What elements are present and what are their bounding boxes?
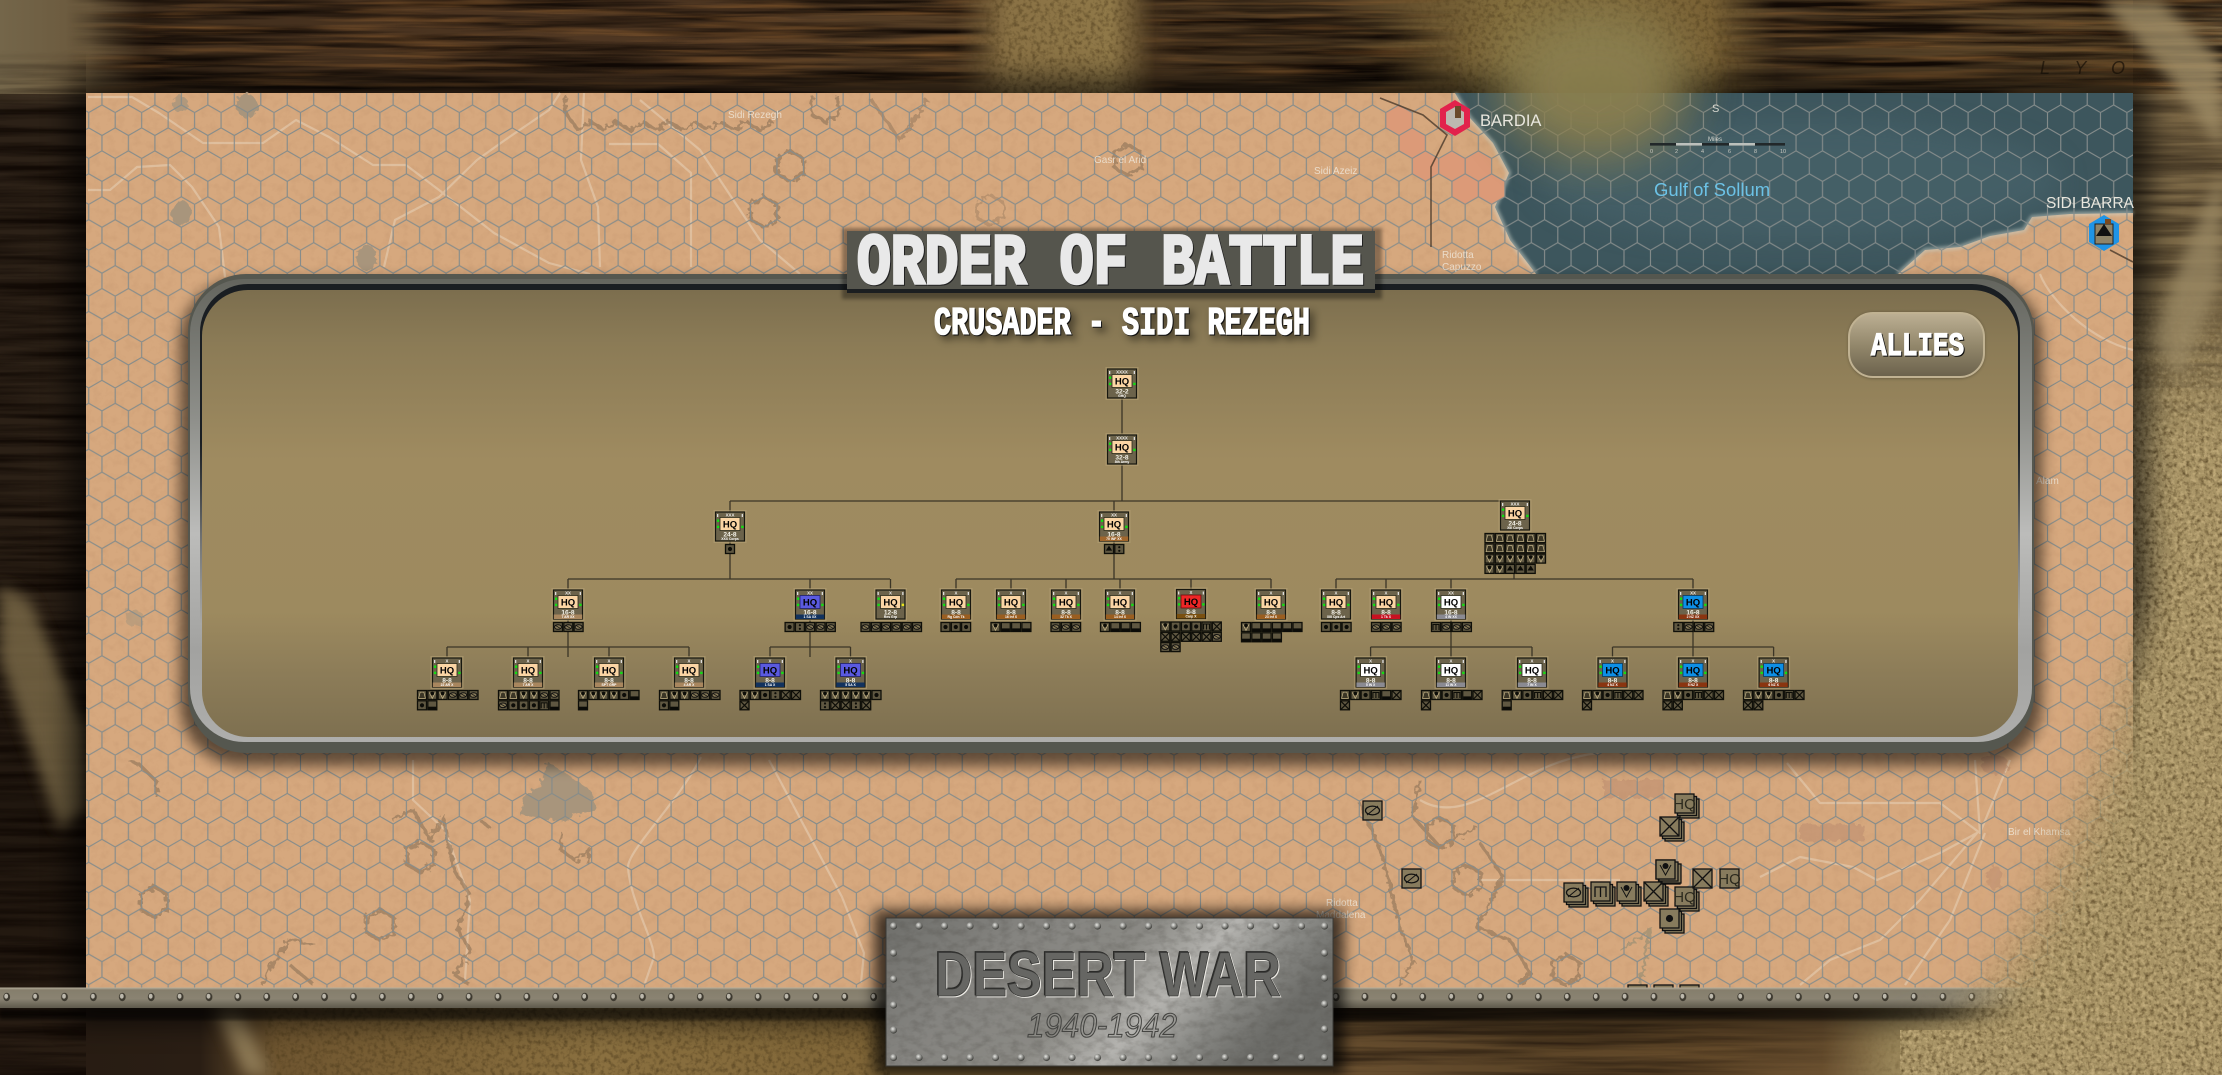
- unit: 2 NZ XX: 16-8: [1686, 609, 1700, 616]
- unit: GHQ 32-2: 32-2: [1115, 388, 1129, 395]
- unit: 70 INF XX: 16-8: [1107, 531, 1121, 538]
- unit: 5 IN X: 8-8: [1366, 677, 1376, 684]
- place labels: S: [1712, 103, 1719, 115]
- unit: 22 AR X: [418, 656, 478, 710]
- unit: 1 Tk X (red band): [1370, 588, 1402, 632]
- unit: 23 Inf X: HQ: [1264, 598, 1278, 608]
- unit counters on the map: [1363, 794, 1741, 1004]
- sand fade over bottom-right of the map: [1882, 606, 2170, 1075]
- rock outcrops: [124, 94, 598, 822]
- unit: 22 AR X: 8-8: [442, 677, 452, 684]
- sea: Gulf of Sollum: [1455, 93, 2133, 274]
- unit: GHQ 32-2: XXXX: [1116, 369, 1128, 374]
- unit: 7 AR XX: 7 AR XX: [561, 615, 575, 619]
- unit: Rg Cdn Tk: [940, 588, 972, 632]
- unit: 4 AR X: 4 AR X: [684, 683, 695, 687]
- unit: 5 NZ X: [1663, 656, 1724, 710]
- unit: 14 Inf X: [1100, 588, 1140, 632]
- place labels: Gasr el Arid: [1094, 155, 1146, 166]
- unit: 4 IN XX: [1432, 588, 1471, 632]
- unit: 16 Inf X: 16 Inf X: [1005, 615, 1018, 619]
- unit: 4 IN XX: 16-8: [1444, 609, 1458, 616]
- unit: Carp X (red): 8-8: [1186, 609, 1196, 616]
- unit: XXX Corps: HQ: [723, 520, 737, 530]
- scale bar: Miles: [1708, 137, 1722, 143]
- unit: 8th Army 32-8: 8th Army: [1115, 460, 1129, 464]
- unit: Rg Cdn Tk: HQ: [949, 598, 963, 608]
- unit: 7 IN X: 8-8: [1527, 677, 1537, 684]
- place labels: Bir el Khamsa: [2008, 827, 2071, 838]
- unit: 1 SA XX: [785, 588, 835, 632]
- unit: 32 Tk X: [1050, 588, 1082, 632]
- unit: 6 NZ X: [1744, 656, 1804, 710]
- unit: 5 NZ X: 8-8: [1688, 677, 1698, 684]
- subtitle: Crusader - Sidi Rezegh: CRUSADER - SIDI REZEGH: [934, 302, 1310, 346]
- place labels: Gulf of Sollum: [1654, 179, 1770, 200]
- unit: 16 Inf X: X: [1010, 590, 1013, 595]
- unit: 8th Army 32-8: HQ: [1115, 442, 1129, 454]
- unit: XIII Cps Art: XIII Cps Art: [1327, 615, 1346, 619]
- connector lines of the org chart: [447, 398, 1774, 657]
- unit: Res Grp: Res Grp: [884, 615, 897, 619]
- unit: XIII Corps: [1485, 499, 1546, 573]
- unit: 4 IN XX: 4 IN XX: [1445, 615, 1458, 619]
- unit: Res Grp: 12-8: [884, 609, 897, 616]
- unit: 7 IN X: X: [1531, 658, 1534, 663]
- unit: 14 Inf X: X: [1119, 590, 1122, 595]
- unit: 5 IN X: [1340, 656, 1401, 710]
- unit: XIII Corps: XIII Corps: [1507, 526, 1523, 530]
- unit: 23 Inf X: [1242, 588, 1302, 642]
- unit: XIII Cps Art: 8-8: [1331, 609, 1341, 616]
- unit: 7 AR XX: XX: [565, 590, 571, 595]
- unit: Rg Cdn Tk: Rg Cdn Tk: [948, 615, 965, 619]
- unit: 2 NZ XX: 2 NZ XX: [1687, 615, 1700, 619]
- unit: 5 SA X: 5 SA X: [845, 683, 857, 687]
- unit: 4 AR X: X: [688, 658, 691, 663]
- unit: 7 IN X: HQ: [1525, 666, 1539, 676]
- unit: 5 IN X: HQ: [1363, 666, 1378, 676]
- unit: Carp X (red): Carp X: [1186, 615, 1197, 619]
- scale bar: 8: [1754, 149, 1757, 155]
- scale bar: 0: [1650, 149, 1653, 155]
- place labels: Alam: [2036, 476, 2059, 487]
- place labels: Ridotta: [1326, 898, 1358, 909]
- unit: 1 SA X: [740, 656, 800, 710]
- unit: 7 AR X: X: [527, 658, 530, 663]
- sand bleeding over the map at top: [1500, 10, 1690, 160]
- unit: 23 Inf X: 8-8: [1266, 609, 1276, 616]
- unit: 8th Army 32-8: XXXX: [1116, 435, 1128, 440]
- unit: 1 SA X: 8-8: [765, 677, 775, 684]
- unit: 23 Inf X: X: [1270, 590, 1273, 595]
- unit: 1 Tk X (red band): X: [1385, 590, 1388, 595]
- unit: Carp X (red): X: [1190, 590, 1193, 595]
- unit: SPT GRP: SPT GRP: [602, 683, 617, 687]
- unit: 5 NZ X: HQ: [1686, 666, 1700, 676]
- unit: 1 SA XX: XX: [807, 590, 813, 595]
- unit: 2 NZ XX: XX: [1690, 590, 1696, 595]
- unit: 1 Tk X (red band): HQ: [1379, 598, 1393, 608]
- unit: 7 AR X: 8-8: [523, 677, 533, 684]
- unit: 4 NZ X: 4 NZ X: [1607, 683, 1619, 687]
- unit: 6 NZ X: 8-8: [1769, 677, 1779, 684]
- unit: 14 Inf X: HQ: [1113, 598, 1127, 608]
- scale bar: 2: [1675, 149, 1678, 155]
- unit: GHQ 32-2: GHQ: [1118, 394, 1126, 398]
- unit: 5 IN X: 5 IN X: [1366, 683, 1376, 687]
- unit: 2 NZ XX: [1674, 588, 1714, 632]
- unit: XIII Corps: 24-8: [1508, 520, 1522, 527]
- unit: 22 AR X: 22 AR X: [441, 683, 454, 687]
- riveted steel strip: [0, 988, 2080, 1020]
- scale bar: 10: [1780, 149, 1786, 155]
- unit: SPT GRP: X: [608, 658, 611, 663]
- unit: 7 AR X: 7 AR X: [523, 683, 534, 687]
- unit: GHQ 32-2: HQ: [1115, 376, 1129, 388]
- old map lettering on the backdrop: L Y O: [2040, 58, 2135, 78]
- unit: 4 NZ X: [1582, 656, 1643, 710]
- title: Order of Battle: ORDER OF BATTLE: [857, 225, 1364, 305]
- unit: 14 Inf X: 8-8: [1115, 609, 1125, 616]
- unit: 5 SA X: [820, 656, 881, 710]
- unit: XXX Corps: XXX: [726, 512, 734, 517]
- unit: 1 SA X: 1 SA X: [765, 683, 776, 687]
- unit: 1 Tk X (red band): 1 Tk X: [1381, 615, 1392, 619]
- unit: XXX Corps: XXX Corps: [721, 537, 739, 541]
- unit: Res Grp: HQ: [883, 598, 898, 608]
- unit: 8th Army 32-8: [1106, 433, 1138, 466]
- hex grid: [86, 93, 2133, 988]
- unit: 23 Inf X: 23 Inf X: [1265, 615, 1278, 619]
- unit: 4 NZ X: 8-8: [1608, 677, 1618, 684]
- place labels: [728, 103, 2135, 921]
- unit: XIII Corps: HQ: [1508, 508, 1522, 520]
- unit: 7 AR X: [498, 656, 559, 710]
- unit: 11 IN X: [1422, 656, 1482, 710]
- unit: 4 AR X: [660, 656, 720, 710]
- unit: 2 NZ XX: HQ: [1686, 598, 1700, 608]
- unit: XIII Cps Art: [1320, 588, 1352, 632]
- escarpment ridges: [129, 95, 1650, 987]
- plate years: 1940-1942: [1027, 1007, 1177, 1045]
- unit: 4 AR X: 8-8: [684, 677, 694, 684]
- unit counters on the map: HQ: [1673, 796, 1696, 813]
- title plate: Desert War: [874, 910, 1344, 1075]
- unit: 4 AR X: HQ: [682, 666, 696, 676]
- panel: order of battle: [180, 274, 2042, 766]
- unit: 70 INF XX: XX: [1111, 512, 1117, 517]
- unit: 32 Tk X: HQ: [1059, 598, 1073, 608]
- unit: 70 INF XX: 70 INF XX: [1106, 537, 1123, 541]
- unit: 11 IN X: 8-8: [1446, 677, 1456, 684]
- unit: 16 Inf X: 8-8: [1006, 609, 1016, 616]
- unit: SPT GRP: [578, 656, 639, 710]
- roads: [88, 93, 2133, 985]
- unit: Carp X (red): HQ: [1184, 597, 1198, 608]
- place labels: Maddalena: [1316, 910, 1366, 921]
- scale bar: 4: [1701, 149, 1704, 155]
- unit: XIII Cps Art: HQ: [1329, 598, 1343, 608]
- place labels: SIDI BARRA: [2046, 195, 2135, 212]
- unit: 22 AR X: X: [446, 658, 449, 663]
- unit: 4 NZ X: HQ: [1605, 666, 1620, 676]
- unit: 4 NZ X: X: [1611, 658, 1614, 663]
- unit: XIII Corps: XXX: [1511, 501, 1519, 506]
- unit: 1 SA XX: 16-8: [803, 609, 817, 616]
- place labels: Sidi Azeiz: [1314, 166, 1357, 177]
- unit: 70 INF XX: [1098, 510, 1130, 554]
- unit: XIII Cps Art: X: [1335, 590, 1338, 595]
- unit: 7 AR XX: 16-8: [561, 609, 575, 616]
- unit: Carp X (red): [1161, 588, 1221, 652]
- scale bar: 6: [1728, 149, 1731, 155]
- unit: 6 NZ X: 6 NZ X: [1768, 683, 1780, 687]
- unit: 7 AR X: HQ: [521, 666, 535, 676]
- place labels: BARDIA: [1480, 112, 1541, 130]
- unit: SPT GRP: 8-8: [604, 677, 614, 684]
- scale bar: [1650, 137, 1786, 155]
- unit: GHQ 32-2: [1106, 367, 1138, 400]
- unit: Rg Cdn Tk: 8-8: [951, 609, 961, 616]
- unit: 11 IN X: X: [1450, 658, 1453, 663]
- unit: Res Grp: [861, 588, 922, 632]
- unit: 8th Army 32-8: 32-8: [1115, 454, 1129, 461]
- unit: 5 IN X: X: [1369, 658, 1372, 663]
- unit: 7 IN X: 7 IN X: [1527, 683, 1537, 687]
- unit: 16 Inf X: [991, 588, 1031, 632]
- unit: 1 SA X: HQ: [763, 666, 777, 676]
- unit: 11 IN X: 11 IN X: [1445, 683, 1457, 687]
- unit: 22 AR X: HQ: [440, 666, 454, 676]
- unit: 7 AR XX: [552, 588, 584, 632]
- unit: 7 IN X: [1502, 656, 1563, 710]
- unit: 14 Inf X: 14 Inf X: [1114, 615, 1127, 619]
- unit counters on the map: HQ: [1673, 889, 1696, 906]
- unit: SPT GRP: HQ: [602, 666, 616, 676]
- unit: 7 AR XX: HQ: [561, 598, 575, 608]
- unit: 5 SA X: X: [849, 658, 852, 663]
- unit: 5 NZ X: X: [1692, 658, 1695, 663]
- unit: 6 NZ X: HQ: [1766, 666, 1781, 676]
- unit: XXX Corps: 24-8: [723, 531, 737, 538]
- button: Allies: [1849, 313, 1984, 378]
- unit: Rg Cdn Tk: X: [955, 590, 958, 595]
- unit: XXX Corps: [714, 510, 746, 554]
- icon: Sidi Barrani fortress marker: [2089, 215, 2119, 251]
- unit: 1 SA X: X: [769, 658, 772, 663]
- unit: 5 NZ X: 5 NZ X: [1688, 683, 1699, 687]
- button: Allies: ALLIES: [1871, 328, 1964, 365]
- coastal hexes near Bardia: [1386, 105, 1505, 204]
- unit: 32 Tk X: 8-8: [1061, 609, 1071, 616]
- plate heading: DESERT WAR: [935, 940, 1281, 1010]
- unit: 4 IN XX: XX: [1448, 590, 1454, 595]
- unit: 6 NZ X: X: [1772, 658, 1775, 663]
- unit counters on the map: HQ: [1718, 871, 1741, 888]
- icon: Bardia fortress marker: [1440, 100, 1470, 136]
- place labels: Capuzzo: [1442, 262, 1482, 273]
- thin track from Bardia: [1380, 98, 2133, 262]
- place labels: Ridotta: [1442, 250, 1474, 261]
- unit: 32 Tk X: 32 Tk X: [1060, 615, 1073, 619]
- unit: 4 IN XX: HQ: [1444, 598, 1458, 608]
- unit: 1 Tk X (red band): 8-8: [1381, 609, 1391, 616]
- unit: 5 SA X: HQ: [843, 666, 858, 676]
- unit: Res Grp: X: [889, 590, 892, 595]
- desert scrub patches: [1604, 703, 2012, 890]
- unit: 16 Inf X: HQ: [1004, 598, 1018, 608]
- unit: 5 SA X: 8-8: [846, 677, 856, 684]
- unit: 1 SA XX: HQ: [803, 598, 817, 608]
- unit: 32 Tk X: X: [1065, 590, 1068, 595]
- unit: 11 IN X: HQ: [1444, 666, 1458, 676]
- unit: 70 INF XX: HQ: [1107, 520, 1121, 530]
- plate rivets: [890, 922, 1328, 1061]
- place labels: Sidi Rezegh: [728, 110, 782, 121]
- unit: 1 SA XX: 1 SA XX: [804, 615, 817, 619]
